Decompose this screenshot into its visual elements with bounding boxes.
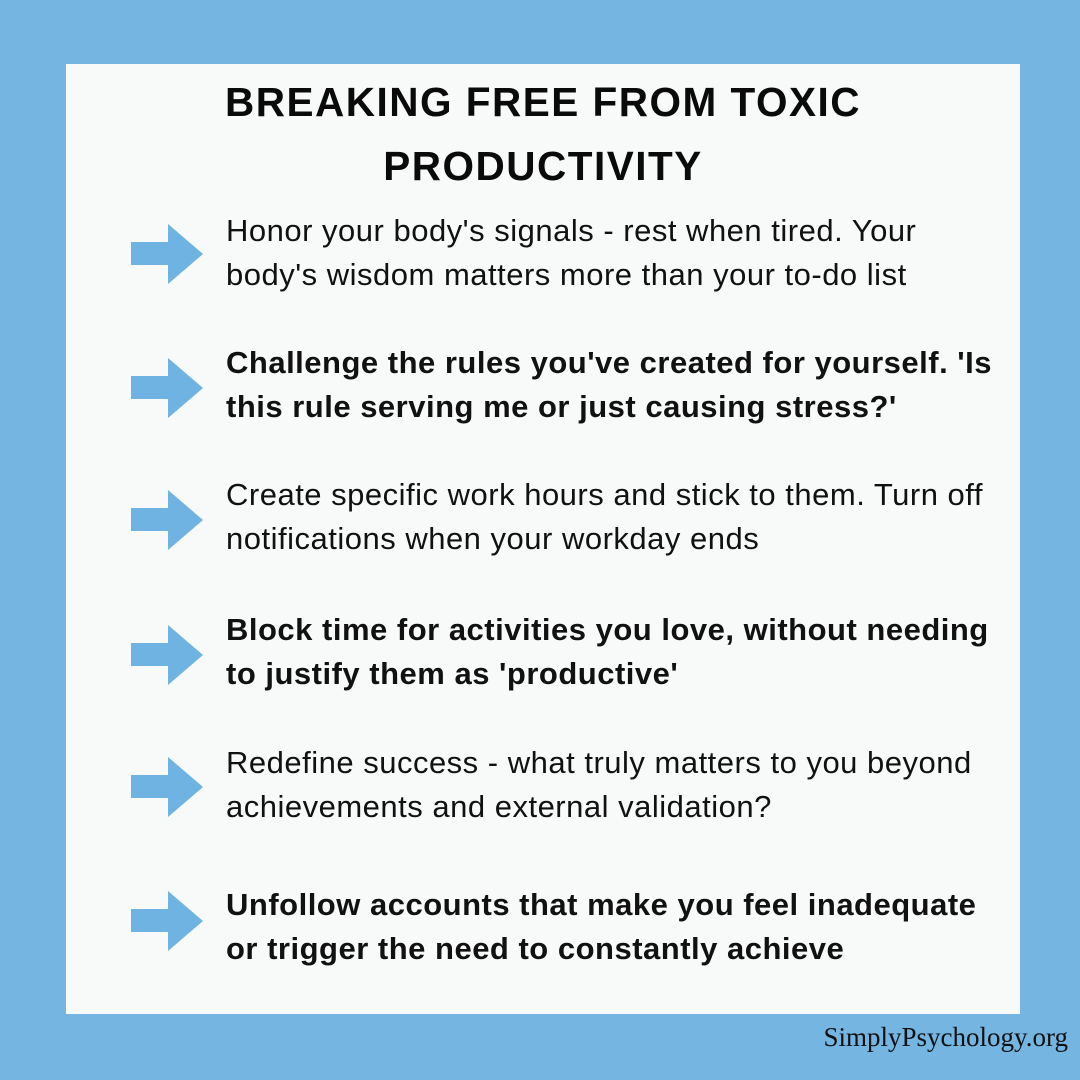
- text: tip 1: Honor your body's signals - rest when tired. Your body's wisdom matters more than your to-do list: [226, 213, 916, 292]
- icon: arrow 2: [131, 358, 203, 418]
- text: tip 6: Unfollow accounts that make you feel inadequate or trigger the need to constantly achieve: [226, 887, 976, 966]
- icon: arrow 4: [131, 625, 203, 685]
- icon: arrow 3: [131, 490, 203, 550]
- icon: arrow 6: [131, 891, 203, 951]
- footer: source: SimplyPsychology.org: [823, 1022, 1068, 1052]
- title: BREAKING FREE FROM TOXIC: [225, 79, 861, 125]
- text: tip 2: Challenge the rules you've created for yourself. 'Is this rule serving me or just causing stress?': [226, 345, 992, 424]
- panel: main white card: [66, 64, 1020, 1014]
- text: tip 5: Redefine success - what truly matters to you beyond achievements and external validation?: [226, 745, 972, 824]
- title: PRODUCTIVITY: [383, 143, 703, 189]
- icon: arrow 1: [131, 224, 203, 284]
- text: tip 3: Create specific work hours and stick to them. Turn off notifications when your workday ends: [226, 477, 983, 556]
- title: [225, 79, 861, 189]
- icon: arrow 5: [131, 757, 203, 817]
- text: tip 4: Block time for activities you love, without needing to justify them as 'productive': [226, 612, 989, 691]
